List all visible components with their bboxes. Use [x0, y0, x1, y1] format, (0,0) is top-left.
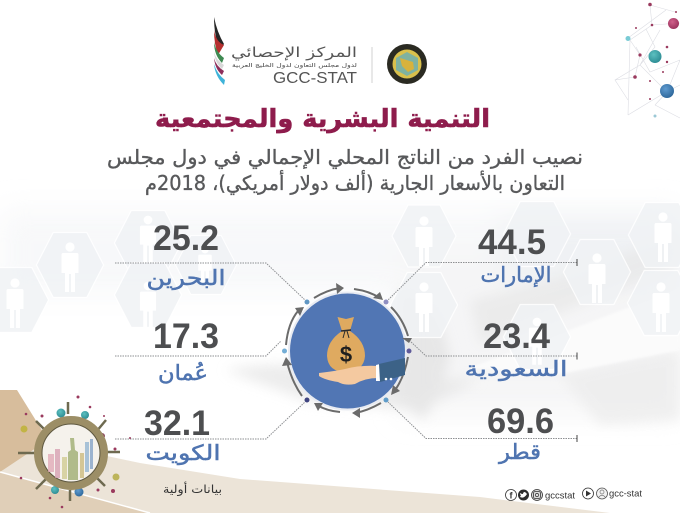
icon: GCC emblem	[387, 44, 427, 84]
logo Arabic name: المركز الإحصائي	[231, 45, 357, 61]
data: Saudi Arabia: 23.4	[483, 317, 551, 356]
data: Kuwait: الكويت	[146, 441, 220, 465]
network decoration top right	[615, 3, 680, 118]
data: UAE	[478, 223, 552, 287]
data: Oman: عُمان	[158, 361, 208, 385]
title: التنمية البشرية والمجتمعية	[155, 104, 490, 134]
connector dots	[282, 300, 412, 402]
data: UAE: الإمارات	[480, 263, 552, 287]
background photo: blurred desk and tablet	[0, 210, 680, 425]
data: Qatar	[487, 402, 554, 464]
data: Qatar: 69.6	[487, 402, 554, 441]
icon: hand	[319, 358, 405, 385]
skyline	[48, 438, 93, 480]
data: Oman	[153, 317, 219, 385]
ship wheel with skyline	[18, 396, 131, 508]
icon: youtube	[582, 488, 594, 499]
icon: facebook: f	[510, 490, 514, 500]
wheel ring	[38, 420, 104, 486]
spheres	[56, 408, 66, 418]
logo GCC-STAT wordmark: GCC-STAT	[273, 70, 357, 87]
icon: instagram	[532, 490, 542, 500]
logo Arabic subtitle: لدول مجلس التعاون لدول الخليج العربية	[232, 63, 357, 69]
data: UAE: 44.5	[478, 223, 546, 262]
data: Oman: 17.3	[153, 317, 219, 356]
data: Kuwait	[144, 404, 220, 465]
data: Bahrain: البحرين	[146, 266, 226, 290]
handle: gccstat: gccstat	[545, 490, 575, 502]
data: Kuwait: 32.1	[144, 404, 210, 443]
data: Qatar: قطر	[498, 440, 541, 464]
subtitle line 2: التعاون بالأسعار الجارية (ألف دولار أمريكي)، 2018م	[145, 170, 565, 196]
data: Bahrain: 25.2	[153, 219, 219, 258]
sphere: teal	[648, 50, 662, 63]
data: Saudi Arabia	[464, 317, 568, 381]
sphere: rose	[668, 18, 679, 29]
icon: money bag: $	[340, 342, 352, 367]
social media handles	[506, 488, 642, 502]
logo: GCC-STAT	[214, 17, 427, 87]
connector lines	[115, 259, 577, 442]
central money icon	[282, 283, 412, 418]
footnote: preliminary data: بيانات أولية	[163, 481, 222, 497]
subtitle line 1: نصيب الفرد من الناتج المحلي الإجمالي في دول مجلس	[107, 145, 583, 170]
network dots	[20, 396, 131, 508]
icon: profile	[596, 488, 608, 499]
data: Saudi Arabia: السعودية	[464, 357, 568, 381]
logo ribbons	[214, 17, 225, 85]
hexagons with person icons	[0, 201, 680, 370]
beige bottom band	[0, 390, 610, 513]
data: Bahrain	[146, 219, 226, 290]
wheel spokes	[18, 402, 120, 501]
handle: gcc-stat: gcc-stat	[609, 488, 642, 500]
sphere: blue	[660, 84, 674, 98]
icon: twitter	[518, 490, 529, 500]
circular arrows	[282, 283, 412, 418]
